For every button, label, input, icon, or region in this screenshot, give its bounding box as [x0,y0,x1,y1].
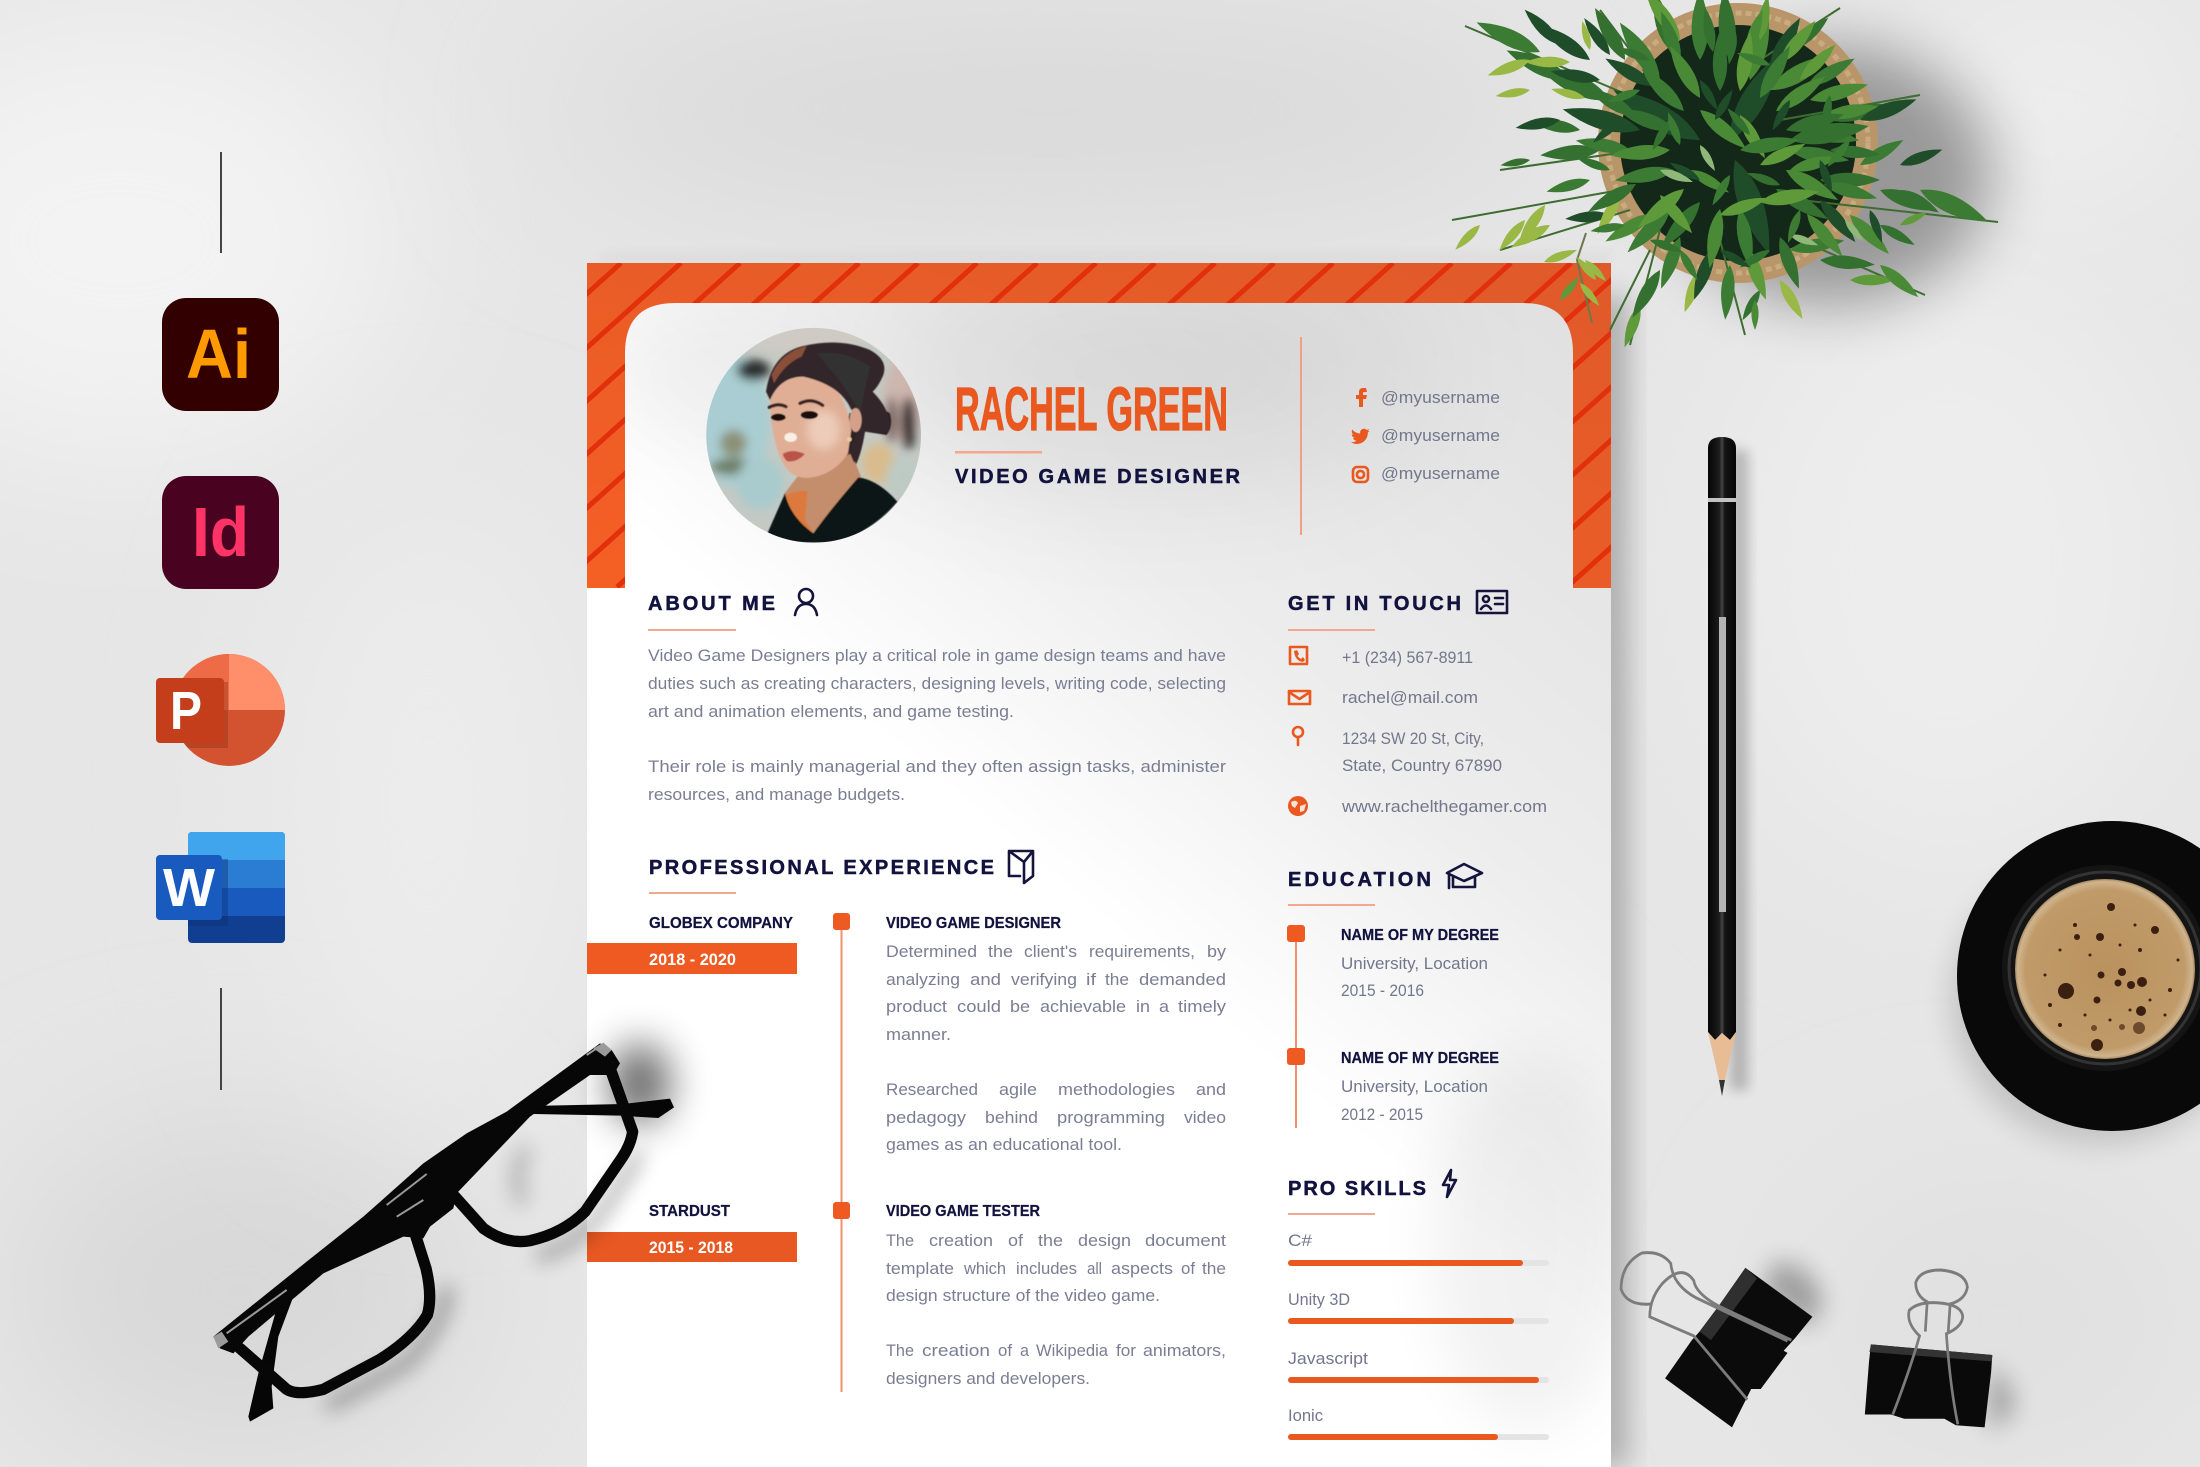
street address: State, Country 67890 [1342,757,1502,775]
role description: product [886,998,947,1016]
street address [1342,730,1502,775]
heading underline [1288,1213,1375,1215]
icon: twitter [1351,429,1370,444]
role description: could [957,998,1001,1016]
website: www.rachelthegamer.com [1341,798,1547,816]
lens rims [240,1063,633,1393]
timeline line [1295,935,1297,1128]
icon: Adobe Illustrator: Ai [186,315,251,393]
phone number: +1 (234) 567-8911 [1342,649,1473,667]
resume sheet [587,263,1611,1467]
temple arm lower [248,1297,293,1422]
role description: verifying [1011,971,1077,989]
graphite point [1719,1080,1725,1096]
role description: demanded [1139,971,1226,989]
role description: design [1078,1232,1131,1250]
role description: a [1020,1342,1030,1360]
role description: the [1038,1232,1063,1250]
icon: lightning bolt [1443,1170,1456,1197]
role description: of [1181,1260,1195,1278]
coffee crema [2015,879,2195,1059]
sharpened wood tip [1708,1032,1736,1080]
role description: document [1145,1232,1226,1250]
role description [886,943,1227,1154]
role description: methodologies [1058,1081,1175,1099]
icon: globe [1288,796,1308,816]
temple arm upper [530,1099,674,1118]
section: education [1287,864,1499,1128]
paper shadow [600,252,1628,1467]
heading: professional experience: PROFESSIONAL EXPERIENCE [649,857,994,879]
frame highlights [227,1047,598,1333]
woven basket [1598,3,1878,283]
role description: the [1105,971,1129,989]
icon: instagram [1353,467,1368,482]
role description: Wikipedia [1036,1342,1109,1360]
job two [587,1202,1226,1388]
heading: education: EDUCATION [1288,869,1431,891]
role description: timely [1178,998,1227,1016]
section: professional experience [587,851,1227,1392]
about text: duties such as creating characters, designing levels, writing code, selecting [648,675,1226,693]
role description: and [970,971,1001,989]
role description: which [963,1260,1006,1278]
role description: a [1159,998,1170,1016]
cup rim [2002,865,2200,1071]
facebook handle: @myusername [1381,389,1500,407]
role description: the [1202,1260,1226,1278]
header: name: RACHEL GREEN [955,375,1228,443]
degree two: NAME OF MY DEGREE [1341,1050,1499,1067]
role description: includes [1016,1260,1077,1278]
heading: about me: ABOUT ME [648,593,775,615]
section: get in touch [1288,591,1547,816]
heading underline [1288,904,1375,906]
company name: GLOBEX COMPANY [649,915,793,932]
role description: all [1087,1260,1102,1278]
potted plant [1452,0,1998,349]
role description: requirements, [1089,943,1195,961]
social links [1351,388,1500,483]
date: 2015 - 2018 [649,1239,733,1257]
role description [886,1232,1226,1388]
skill bar: C# [1288,1232,1549,1266]
icon: Adobe InDesign [162,476,279,589]
role description: behind [985,1109,1038,1127]
job title: VIDEO GAME DESIGNER [955,466,1241,488]
icon: envelope [1289,691,1310,704]
about text: Their role is mainly managerial and they often assign tasks, administer [648,758,1227,776]
email address: rachel@mail.com [1342,689,1478,707]
heading: get in touch: GET IN TOUCH [1288,593,1461,615]
role description: games as an educational tool. [886,1136,1122,1154]
icon: door [1009,851,1033,883]
role description: analyzing [886,971,960,989]
role description: designers and developers. [886,1370,1090,1388]
role description: The [886,1342,914,1360]
company name: STARDUST [649,1203,730,1220]
timeline node [833,913,850,930]
role description: Researched [886,1081,978,1099]
skill bar: Javascript: Javascript [1288,1350,1368,1368]
header: portrait photo [706,328,921,543]
section: pro skills [1288,1170,1549,1440]
about text: resources, and manage budgets. [648,786,905,804]
about text [648,647,1227,804]
role description: the [988,943,1013,961]
role description: video [1184,1109,1226,1127]
skill bar: Javascript [1288,1350,1549,1383]
degree two: University, Location [1341,1078,1488,1096]
skill bar: Unity 3D [1288,1291,1549,1324]
icon: Microsoft PowerPoint [156,654,285,766]
icon: map pin [1293,727,1303,745]
role description: be [1010,998,1030,1016]
binder clip right [1865,1270,2015,1429]
icon: Adobe Illustrator [162,298,279,411]
hinges [213,1043,612,1348]
role description: aspects [1111,1260,1173,1278]
foliage [1452,0,1998,349]
timeline line [840,925,842,1392]
role title: VIDEO GAME TESTER [886,1203,1040,1220]
glasses shadow [327,1043,670,1407]
date: 2018 - 2020 [649,951,736,969]
role description: and [1196,1081,1226,1099]
role description: pedagogy [886,1109,967,1127]
role description: programming [1057,1109,1165,1127]
pencil body [1708,437,1736,1040]
twitter handle: @myusername [1381,427,1500,445]
pencil [1708,437,1748,1096]
role description: of [1008,1232,1023,1250]
heading underline [1288,629,1375,631]
heading: pro skills: PRO SKILLS [1288,1178,1426,1200]
role description: of [998,1342,1012,1360]
heading underline [649,892,736,894]
degree two: 2012 - 2015 [1341,1106,1423,1124]
role description: in [1136,998,1150,1016]
role description: The [886,1232,914,1250]
role description: by [1207,943,1227,961]
striped orange header frame [587,263,1611,588]
icon: facebook [1356,388,1367,407]
icon: Microsoft Word [156,832,285,943]
side decoration line bottom [220,988,222,1090]
icon: Microsoft PowerPoint: P [170,681,202,741]
about text: Video Game Designers play a critical role in game design teams and have [648,647,1226,665]
icon: id card [1477,591,1507,613]
skill bar: Unity 3D: Unity 3D [1288,1291,1350,1309]
coffee bubbles [2044,903,2180,1051]
role description: creation [922,1342,990,1360]
job one [587,913,1227,1154]
role description: design structure of the video game. [886,1287,1160,1305]
coffee cup on saucer [1950,821,2200,1145]
saucer [1957,821,2200,1131]
timeline node [833,1202,850,1219]
heading underline [648,629,736,631]
date bar [587,1232,797,1262]
skill bar: Ionic: Ionic [1288,1407,1323,1425]
icon: person [795,589,817,615]
role title: VIDEO GAME DESIGNER [886,915,1061,932]
skill bar: C#: C# [1288,1232,1313,1250]
role description: animators, [1143,1342,1226,1360]
pencil shadow [1730,450,1748,1090]
degree one: University, Location [1341,955,1488,973]
degree one: 2015 - 2016 [1341,982,1424,1000]
role description: for [1116,1342,1137,1360]
role description: achievable [1040,998,1126,1016]
icon: graduation cap [1447,864,1482,888]
degree two [1287,1048,1499,1124]
icon: Adobe InDesign: Id [192,493,249,571]
skill bar: Ionic [1288,1407,1549,1440]
degree one: NAME OF MY DEGREE [1341,927,1499,944]
binder clip left [1621,1253,1824,1427]
sheet shading [625,303,1611,1411]
plant shadow [1670,45,1990,305]
role description: agile [999,1081,1037,1099]
role description: template [886,1260,954,1278]
street address: 1234 SW 20 St, City, [1342,730,1484,748]
role description: if [1086,971,1097,989]
name underline [955,451,1042,454]
role description: creation [929,1232,993,1250]
icon: Microsoft Word: W [163,858,215,918]
about text: art and animation elements, and game testing. [648,703,1014,721]
role description: Determined [886,943,977,961]
date bar [587,943,797,974]
reading glasses [213,1043,674,1422]
role description: manner. [886,1026,951,1044]
instagram handle: @myusername [1381,465,1500,483]
icon: phone [1290,647,1307,664]
role description: client's [1024,943,1077,961]
degree one [1287,925,1499,1000]
side decoration line top [220,152,222,253]
section: about me [648,589,1227,804]
body highlight [1719,617,1726,912]
top frame bar and bridge [213,1043,620,1353]
silver band [1708,498,1736,502]
header divider [1300,337,1302,535]
